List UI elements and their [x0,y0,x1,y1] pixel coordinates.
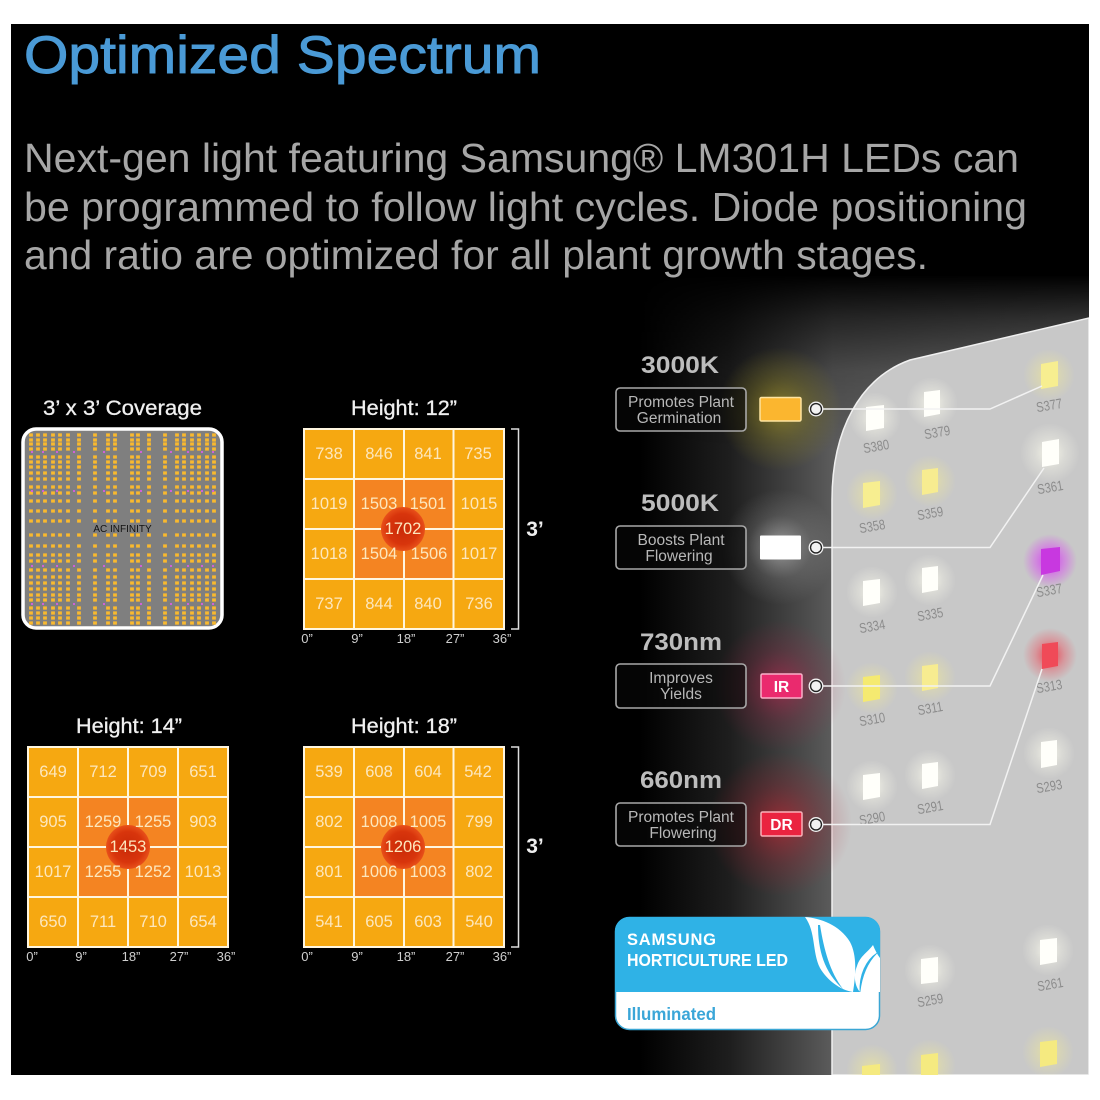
heatmap: height 12 [301,397,511,646]
heatmap: height 12: 736 [465,595,493,613]
heatmap: height 14: 18” [122,949,140,964]
heatmap: height 14: 1255 [85,863,121,881]
spectrum row: 660nm: Promotes Plant [628,809,735,826]
badge: Samsung Horticulture LED: HORTICULTURE LED [627,950,788,970]
badge: Samsung Horticulture LED: SAMSUNG [627,931,716,949]
spectrum row: 660nm: DR [770,817,793,834]
spectrum row: 5000K: Flowering [645,548,713,565]
heatmap: height 18: 27” [446,949,464,964]
heatmap: height 14: 649 [39,763,67,781]
spectrum row: 730nm [616,575,1043,752]
heatmap: height 12: 1501 [410,495,446,513]
heatmap: height 18: 9” [351,949,363,964]
heatmap: height 18: 1206 [385,838,421,856]
heatmap: height 12: 9” [351,631,363,646]
heatmap: height 12: 735 [464,445,492,463]
description text: Next-gen light featuring Samsung® LM301H LEDs can [24,135,1019,181]
spectrum row: 5000K: Boosts Plant [637,532,725,549]
diodes [862,361,1060,1075]
diode labels: S261 [1036,975,1064,995]
diode labels: S379 [923,423,951,443]
dimension bracket: 18 [511,747,544,947]
heatmap: height 14: 711 [90,913,116,931]
diode labels: S290 [858,809,886,829]
diode labels: S311 [916,699,944,718]
icon: leaves [805,917,880,992]
LED board [832,318,1089,1096]
spectrum row: 3000K: Germination [637,410,721,427]
heatmap: height 14: 710 [139,913,167,931]
heatmap: height 12: 844 [365,595,393,613]
heatmap: height 18: 1005 [410,813,446,831]
heatmap: height 12: 36” [493,631,511,646]
coverage heading: 3’ x 3’ Coverage [43,397,202,420]
badge: Samsung Horticulture LED [615,917,880,1030]
heatmap: height 18: 1003 [410,863,446,881]
heatmap: height 18: 605 [365,913,393,931]
heatmap: height 12: 18” [397,631,415,646]
diode labels: S335 [916,605,944,625]
spectrum row: 3000K: 3000K [641,352,719,379]
heatmap: height 14: 9” [75,949,87,964]
heatmap: height 18: 801 [315,863,343,881]
heatmap: height 14: 905 [39,813,67,831]
diode labels [858,396,1064,1011]
heatmap: height 14: 0” [26,949,38,964]
heading: height 14: Height: 14” [76,715,182,738]
diode labels: S334 [858,617,886,637]
heatmap: height 18: 799 [465,813,493,831]
diode labels: S361 [1036,478,1064,498]
heatmap: height 14: 1255 [135,813,171,831]
spectrum row: 660nm [616,669,1042,896]
diode labels: S259 [916,991,944,1011]
dimension bracket: 12: 3’ [526,518,544,541]
diode labels: S310 [858,710,886,730]
dimension bracket: 18: 3’ [526,835,544,858]
heatmap: height 18: 802 [315,813,343,831]
heatmap: height 14: 1252 [135,863,171,881]
heatmap: height 14: 27” [170,949,188,964]
heatmap: height 14: 1013 [185,863,221,881]
heatmap: height 12: 1019 [311,495,347,513]
heatmap: height 14 [26,715,235,964]
heatmap: height 18: 802 [465,863,493,881]
heatmap: height 18: 36” [493,949,511,964]
heatmap: height 18 [301,715,511,964]
heatmap: height 14: 1017 [35,863,71,881]
heatmap: height 14: 650 [39,913,67,931]
heatmap: height 12: 846 [365,445,393,463]
heatmap: height 18: 540 [465,913,493,931]
heatmap: height 18: 541 [315,913,343,931]
heatmap: height 18: 1006 [361,863,397,881]
spectrum row: 730nm: Improves [649,670,713,687]
heatmap: height 14: 654 [189,913,217,931]
dimension bracket: 12 [511,429,544,629]
heatmap: height 14: 651 [189,763,217,781]
heatmap: height 14: 709 [139,763,167,781]
heading: height 18: Height: 18” [351,715,457,738]
diode labels: S291 [916,798,944,818]
coverage LED board: AC INFINITY [93,524,152,535]
description text: be programmed to follow light cycles. Diode positioning [24,184,1027,230]
heatmap: height 18: 539 [315,763,343,781]
badge: Samsung Horticulture LED: Illuminated [627,1004,716,1024]
heatmap: height 18: 0” [301,949,313,964]
spectrum row: 660nm: 660nm [640,767,722,794]
heatmap: height 18: 542 [464,763,492,781]
spectrum row: 5000K: 5000K [641,490,719,517]
spectrum row: 5000K [616,468,1044,605]
diode labels: S380 [862,437,890,457]
heatmap: height 12: 1506 [411,545,447,563]
board glow [640,275,1089,1075]
diode labels: S358 [858,517,886,537]
heatmap: height 12: 840 [414,595,442,613]
heatmap: height 14: 712 [89,763,117,781]
heatmap: height 12: 27” [446,631,464,646]
heatmap: height 18: 1008 [361,813,397,831]
diode labels: S377 [1035,396,1063,416]
heatmap: height 12: 738 [315,445,343,463]
heatmap: height 12: 1504 [361,545,397,563]
heatmap: height 18: 608 [365,763,393,781]
diode labels: S337 [1035,581,1063,601]
heatmap: height 12: 0” [301,631,313,646]
heatmap: height 18: 603 [414,913,442,931]
heatmap: height 18: 18” [397,949,415,964]
diode glows [846,349,1080,1096]
diode labels: S293 [1035,777,1063,797]
description text: and ratio are optimized for all plant growth stages. [24,232,928,278]
spectrum row: 3000K [616,347,1042,471]
heading: height 12: Height: 12” [351,397,457,420]
title: Optimized Spectrum [24,26,541,85]
description text [24,135,1027,278]
heatmap: height 12: 841 [414,445,442,463]
spectrum row: 730nm: IR [774,679,789,696]
spectrum row: 3000K: Promotes Plant [628,394,735,411]
heatmap: height 14: 903 [189,813,217,831]
heatmap: height 12: 1015 [461,495,497,513]
coverage LED board [23,429,222,628]
heatmap: height 14: 1259 [85,813,121,831]
heatmap: height 12: 1503 [361,495,397,513]
heatmap: height 12: 737 [315,595,343,613]
heatmap: height 14: 1453 [110,838,146,856]
heatmap: height 14: 36” [217,949,235,964]
heatmap: height 18: 604 [414,763,442,781]
spectrum row: 660nm: Flowering [649,825,717,842]
diode labels: S359 [916,504,944,524]
spectrum row: 730nm: Yields [660,686,702,703]
diode labels: S313 [1035,677,1063,697]
heatmap: height 12: 1017 [461,545,497,563]
spectrum row: 730nm: 730nm [640,629,722,656]
heatmap: height 12: 1702 [385,520,421,538]
heatmap: height 12: 1018 [311,545,347,563]
